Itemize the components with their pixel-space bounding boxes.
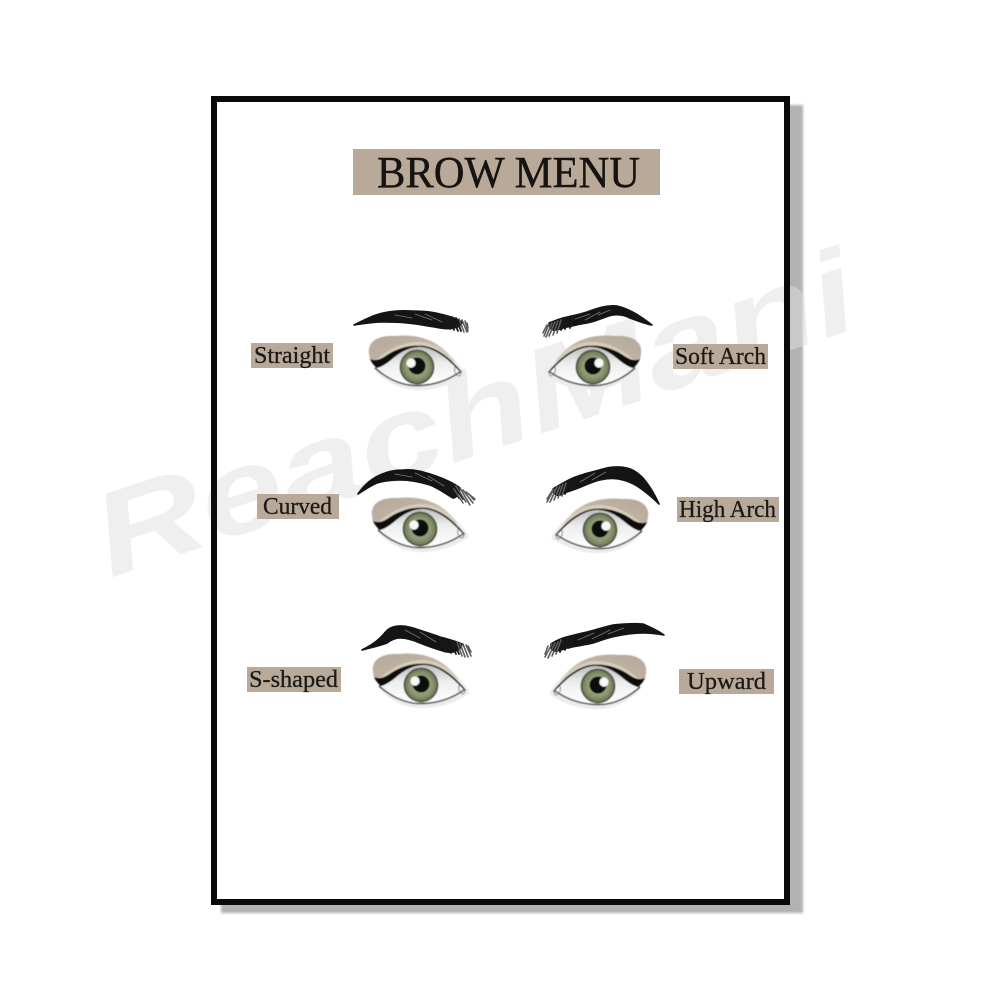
brow: s-shaped xyxy=(362,626,471,657)
poster drop shadow xyxy=(221,105,803,913)
label: s-shaped: S-shaped xyxy=(249,667,338,693)
brow: upward xyxy=(545,624,664,658)
panel: high arch brow xyxy=(547,467,779,553)
label: upward: Upward xyxy=(687,669,766,695)
panel: curved brow xyxy=(257,470,475,552)
brow: high arch xyxy=(547,467,659,504)
label: straight: Straight xyxy=(254,343,330,369)
eye: s-shaped xyxy=(373,653,470,708)
eye: high arch xyxy=(551,498,648,553)
eye: soft arch xyxy=(544,335,641,390)
title: BROW MENU xyxy=(377,148,640,197)
panel: straight brow xyxy=(251,311,468,390)
eye: straight xyxy=(369,335,466,390)
panel: upward brow xyxy=(545,624,774,709)
panel: soft arch brow xyxy=(543,306,768,390)
poster sheet xyxy=(214,99,787,902)
eye: curved xyxy=(372,497,469,552)
label: curved: Curved xyxy=(263,494,332,520)
brow: straight xyxy=(354,311,468,332)
eye: upward xyxy=(549,654,646,709)
label: high arch: High Arch xyxy=(679,497,776,523)
label: soft arch: Soft Arch xyxy=(675,344,766,370)
poster black frame xyxy=(214,99,787,902)
brow: soft arch xyxy=(543,306,652,337)
watermark: ReachMani xyxy=(76,224,875,603)
brow: curved xyxy=(358,470,475,505)
panel: s-shaped brow xyxy=(247,626,471,708)
